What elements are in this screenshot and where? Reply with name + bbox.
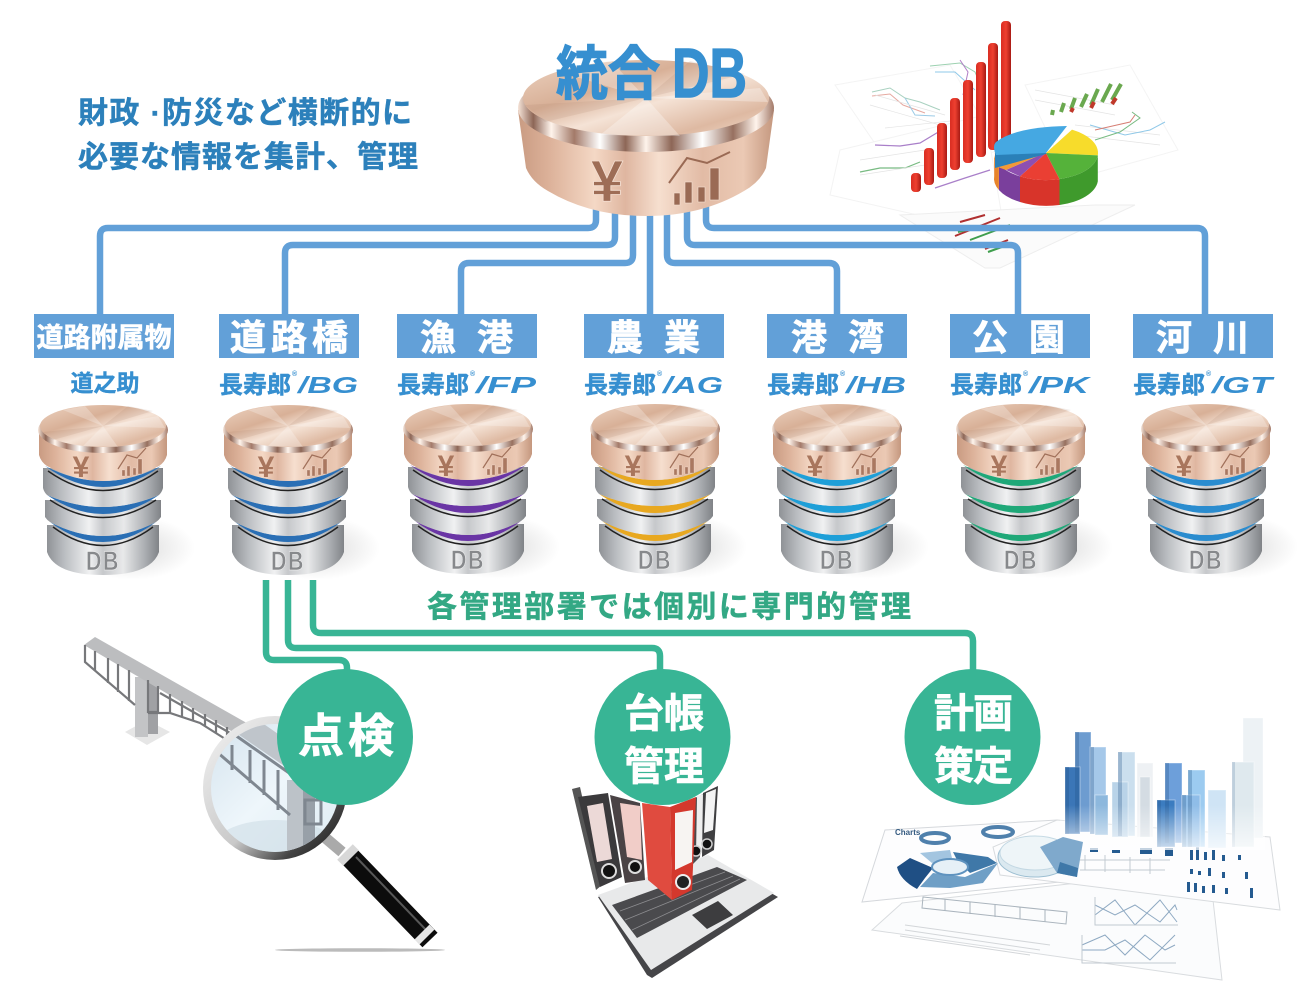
text block: description: 財政 ·防災など横断的に <box>78 97 412 130</box>
product name: AG: /AG <box>662 372 723 398</box>
product name: GT: 長寿郎 <box>1133 372 1205 399</box>
product name: GT <box>1133 370 1275 399</box>
chart emboss <box>669 152 730 205</box>
product name: AG: ® <box>657 370 663 378</box>
callout circle: 台帳管理: 台帳 <box>624 692 704 736</box>
text block: description <box>78 97 418 174</box>
icon: DB cylinder 道路橋: ¥ <box>258 451 275 484</box>
icon: DB cylinder 河川: ¥ <box>1176 450 1193 483</box>
product name: PK: 長寿郎 <box>950 372 1022 399</box>
label: 港湾: 港湾 <box>791 317 884 358</box>
title: DB <box>672 34 747 112</box>
illustration: reports and glass bar chart <box>862 718 1280 980</box>
icon: DB cylinder 公園 <box>956 404 1113 579</box>
label: 港湾 <box>767 314 907 358</box>
label: 公園: 公園 <box>972 317 1065 358</box>
icon: DB cylinder 農業: ¥ <box>625 450 642 483</box>
product name: PK: /PK <box>1027 372 1091 398</box>
product name: BG: /BG <box>297 372 358 398</box>
product name: HB: ® <box>840 370 846 378</box>
label: 漁港 <box>397 314 537 358</box>
callout circle: 点検: 点検 <box>298 710 394 762</box>
text block: description: 必要な情報を集計、管理 <box>78 141 418 174</box>
product name: HB <box>767 370 906 399</box>
icon: DB cylinder 漁港 <box>403 404 560 579</box>
connector lines: integrated DB to departments <box>100 200 1205 314</box>
title: 統合 <box>556 42 660 107</box>
icon: DB cylinder 道路橋 <box>223 405 380 580</box>
label: 漁港: 漁港 <box>420 317 513 358</box>
illustration: bridge and magnifying glass <box>84 637 445 952</box>
product name: GT: /GT <box>1210 372 1275 398</box>
caption: department management: 各管理部署では個別に専門的管理 <box>427 591 911 624</box>
icon: DB cylinder 港湾: DB <box>820 545 854 575</box>
title <box>556 34 747 112</box>
glass disc <box>998 837 1072 877</box>
product name: GT: ® <box>1206 370 1212 378</box>
callout circle: 台帳管理: 管理 <box>624 745 704 789</box>
product name: HB: 長寿郎 <box>767 372 839 399</box>
glass bars <box>1065 718 1263 848</box>
icon: DB cylinder 港湾 <box>772 404 929 579</box>
connector lines: 道路橋 DB to functions <box>266 580 973 674</box>
icon: DB cylinder 農業: DB <box>638 545 672 575</box>
icon: DB cylinder 漁港: ¥ <box>438 450 455 483</box>
product name: AG: 長寿郎 <box>584 372 656 399</box>
product name: PK <box>950 370 1091 399</box>
icon: DB cylinder 道路橋: DB <box>271 546 305 576</box>
callout circle: 計画策定: 策定 <box>934 745 1013 789</box>
label: 道路橋: 道路橋 <box>230 317 348 358</box>
product name: FP: 長寿郎 <box>397 372 469 399</box>
product name: FP: ® <box>470 370 476 378</box>
product name: HB: /HB <box>844 372 906 398</box>
icon: DB cylinder 公園: DB <box>1004 545 1038 575</box>
icon: DB cylinder 河川 <box>1141 404 1298 579</box>
product name: FP <box>397 370 537 399</box>
product name: BG: 長寿郎 <box>219 372 291 399</box>
icon: DB cylinder 漁港: DB <box>451 545 485 575</box>
product name: PK: ® <box>1023 370 1029 378</box>
label: 農業: 農業 <box>607 317 700 358</box>
callout circle: 台帳管理 <box>594 669 730 805</box>
icon: DB cylinder 港湾: ¥ <box>807 450 824 483</box>
label: 公園 <box>950 314 1090 358</box>
product name: AG <box>584 370 723 399</box>
product name: FP: /FP <box>474 372 537 398</box>
illustration: laptop with binders <box>572 786 778 978</box>
icon: large copper integrated DB <box>518 60 774 216</box>
label: 道路附属物 <box>34 314 174 358</box>
illustration: reports and glass bar chart: Charts <box>895 828 921 837</box>
label: 河川: 河川 <box>1156 317 1249 358</box>
icon: DB cylinder 河川: DB <box>1189 545 1223 575</box>
callout circle: 計画策定: 計画 <box>934 692 1013 736</box>
icon: DB cylinder 道路附属物: DB <box>86 546 120 576</box>
product name: BG <box>219 370 358 399</box>
pie chart <box>994 126 1098 206</box>
label: 道路附属物: 道路附属物 <box>36 323 172 353</box>
callout circle: 計画策定 <box>904 669 1040 805</box>
yen emboss: ¥ <box>591 149 623 214</box>
icon: DB cylinder 道路附属物 <box>38 405 195 580</box>
icon: DB cylinder 公園: ¥ <box>991 450 1008 483</box>
illustration: analytics papers with bar and pie chart <box>830 21 1178 268</box>
label: 河川 <box>1133 314 1273 358</box>
product name: 道之助: 道之助 <box>70 370 140 396</box>
icon: DB cylinder 農業 <box>590 404 747 579</box>
callout circle: 点検 <box>277 669 413 805</box>
icon: DB cylinder 道路附属物: ¥ <box>73 451 90 484</box>
label: 農業 <box>584 314 724 358</box>
product name: BG: ® <box>292 370 298 378</box>
